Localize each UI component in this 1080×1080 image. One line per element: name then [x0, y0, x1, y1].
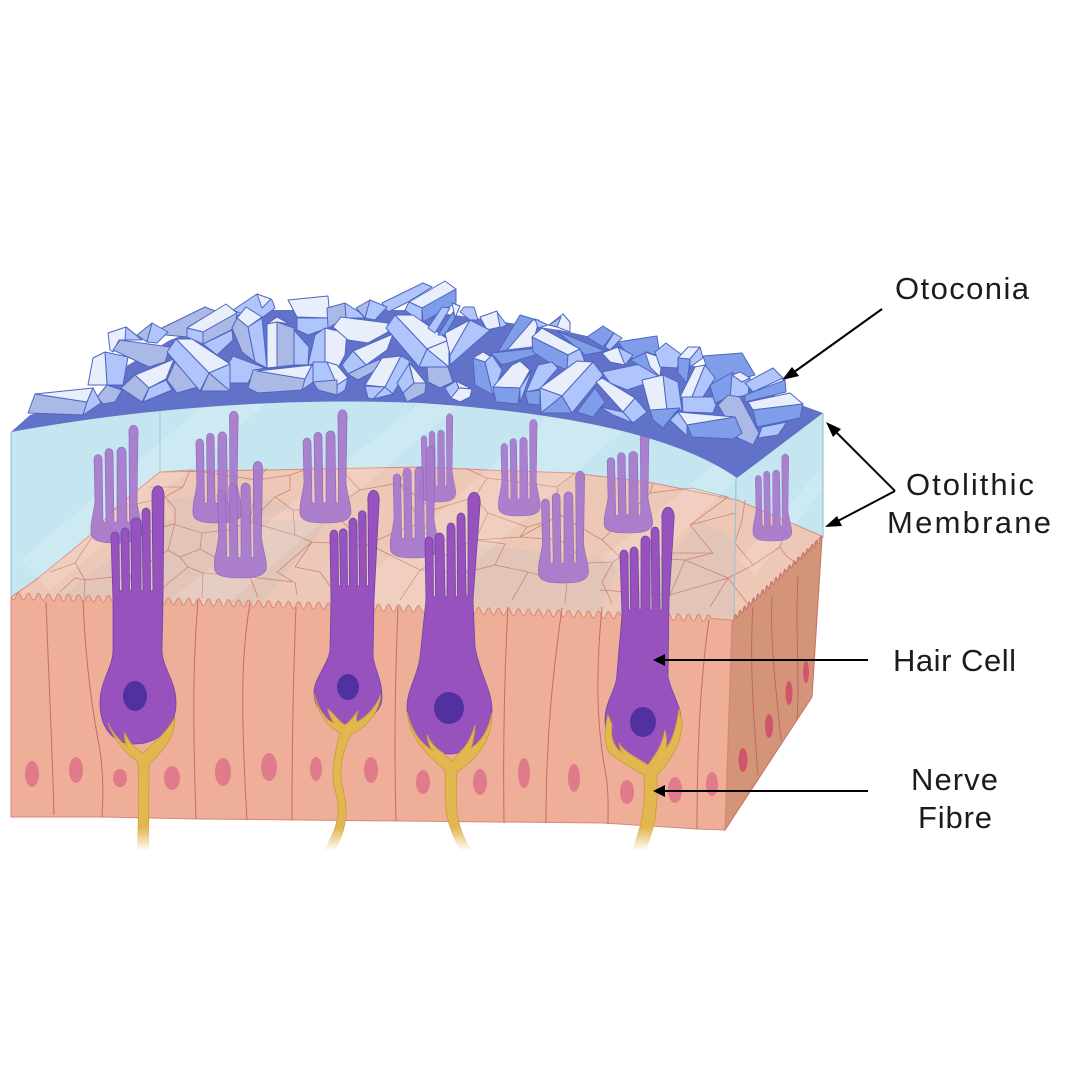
- arrow: nerve fibre: [653, 785, 868, 797]
- arrows: otolithic membrane: [825, 422, 895, 527]
- hair bundle 5: [419, 414, 456, 502]
- label: Nerve Fibre: [911, 762, 998, 835]
- diagram: otolithic organ cross-section: [10, 277, 1050, 850]
- arrow: hair cell: [653, 654, 868, 666]
- hair cell 2 with nerve fibre: [314, 490, 382, 850]
- label: Otoconia: Otoconia: [895, 271, 1030, 306]
- arrow: otoconia: [782, 309, 882, 380]
- label: Otolithic Membrane: Otolithic: [906, 467, 1034, 502]
- hair bundle 9: [604, 433, 653, 533]
- hair bundle 3: [300, 410, 351, 523]
- hair bundle 8: [538, 471, 588, 583]
- back hair bundles in membrane: [91, 410, 792, 583]
- hair bundle 4: [214, 461, 267, 578]
- membrane corner edge lines: [11, 413, 823, 620]
- membrane top surface: [11, 310, 823, 478]
- epithelium side face: [725, 536, 822, 830]
- epithelial surface with cell network: [11, 467, 822, 625]
- hair cell 4 with nerve fibre: [605, 507, 682, 850]
- hair bundle 2: [193, 411, 242, 523]
- hair bundle 1: [91, 425, 142, 543]
- otoconia crystals: [28, 281, 803, 445]
- hair bundle 10: [753, 454, 792, 541]
- hair bundle 7: [498, 419, 540, 516]
- label: Nerve Fibre: Nerve: [911, 762, 998, 797]
- hair cell 3 with nerve fibre: [407, 492, 492, 850]
- label: Otolithic Membrane: [887, 467, 1051, 540]
- epithelium front face with supporting cells: [11, 593, 732, 830]
- label: Nerve Fibre: Fibre: [918, 800, 992, 835]
- otolithic membrane: blue gel block: [11, 402, 823, 625]
- hair cell 1 with nerve fibre: [100, 486, 176, 850]
- label: Hair Cell: Hair Cell: [893, 643, 1016, 678]
- label: Otolithic Membrane: Membrane: [887, 505, 1051, 540]
- hair bundle 6: [390, 446, 439, 558]
- membrane light streaks: [38, 442, 795, 612]
